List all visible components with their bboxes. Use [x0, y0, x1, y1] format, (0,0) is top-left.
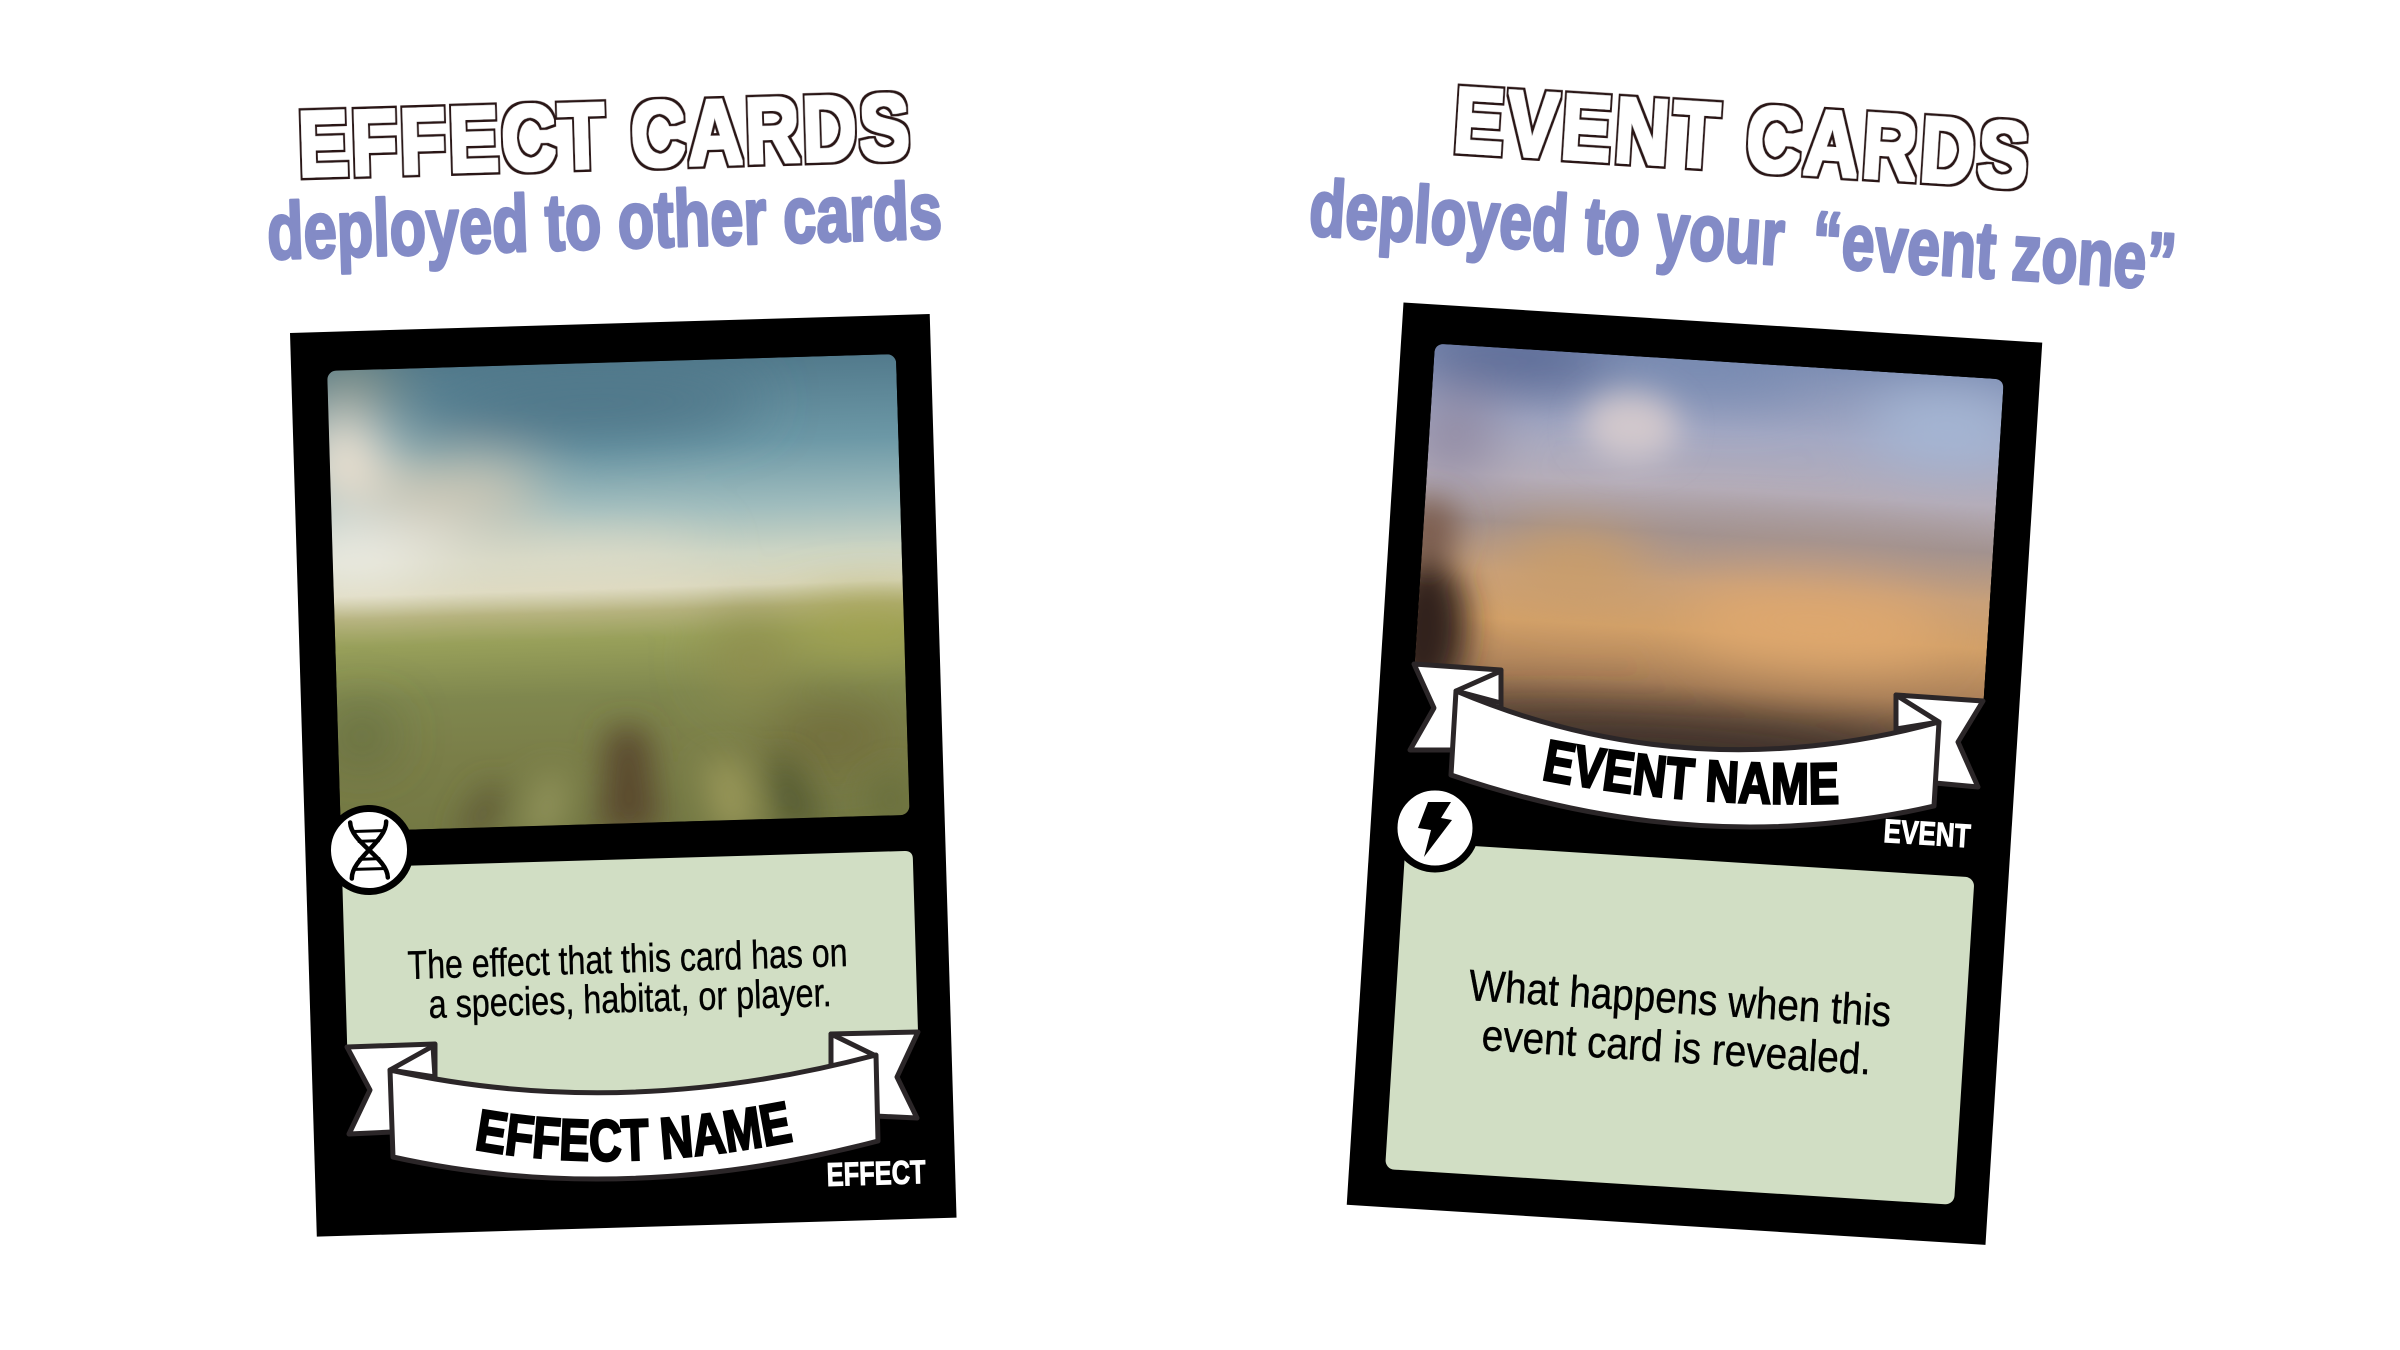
banner: effect name — [344, 1030, 926, 1186]
effect text panel — [342, 851, 920, 1112]
icon: dna badge — [326, 807, 412, 893]
blurred field photo — [327, 354, 910, 830]
banner: effect name: EFFECT NAME — [476, 1100, 794, 1162]
icon: lightning badge — [1394, 787, 1476, 869]
card frame — [290, 314, 957, 1237]
card frame — [1347, 302, 2042, 1245]
heading: event cards: EVENT CARDS — [1451, 68, 2032, 207]
effect description: a species, habitat, or player. — [428, 971, 832, 1027]
banner: event name — [1408, 662, 1986, 830]
blurred desert photo — [1415, 344, 2004, 748]
label: event type: EVENT — [1883, 812, 1972, 854]
effect description: The effect that this card has on — [407, 931, 848, 988]
label: effect type: EFFECT — [826, 1153, 926, 1193]
panel: event card — [1347, 302, 2042, 1245]
effect description — [407, 931, 848, 1027]
banner: event name: EVENT NAME — [1542, 739, 1839, 805]
heading: effect cards: EFFECT CARDS — [297, 75, 911, 196]
subheading: deployed to other cards: deployed to other cards — [266, 166, 943, 276]
event description — [1467, 961, 1893, 1084]
panel: effect card — [260, 314, 967, 1237]
event text panel — [1385, 842, 1975, 1205]
event description: What happens when this — [1467, 961, 1893, 1037]
event description: event card is revealed. — [1480, 1011, 1873, 1084]
